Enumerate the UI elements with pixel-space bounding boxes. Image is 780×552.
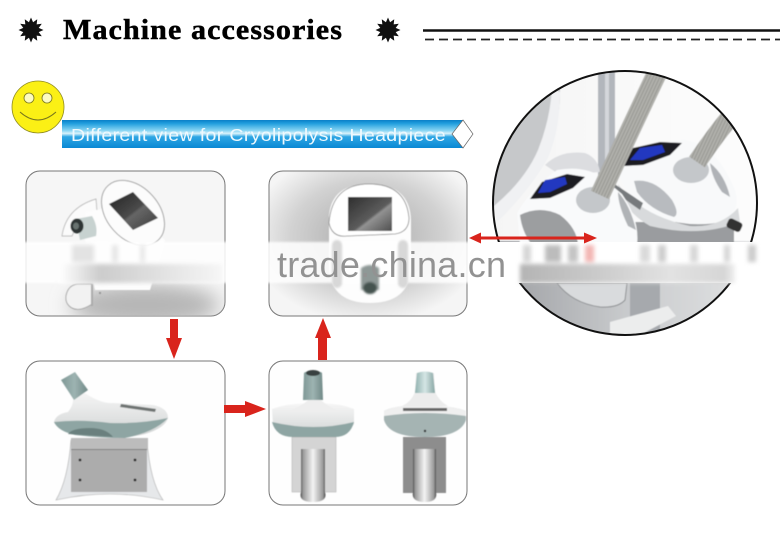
nozzle [61,372,88,400]
band over circle [470,242,762,283]
blurred content in left panel band [60,245,222,283]
panel: bottom-right views [269,361,467,505]
icon: smiley face [12,81,64,133]
head body [54,391,168,438]
left machine column [494,89,560,206]
right head [676,222,718,225]
base stand [56,440,163,500]
panel: circular close-up [493,71,757,335]
panel: top-left view [26,168,225,327]
watermark text: trade.china.cn [277,244,506,285]
bracket below heads [634,222,734,244]
blurred content in circle band [520,245,756,283]
seam between heads [612,183,643,210]
left head [517,169,637,245]
pole [598,71,615,186]
left head lobe [545,152,600,175]
grey plate [71,438,148,492]
hoses [600,71,658,195]
title: Machine accessories [63,15,343,46]
panel: bottom-left side view [26,361,225,505]
subtitle banner [62,120,473,148]
arrow: double-headed red link to close-up [469,232,597,244]
band over left panels [14,242,470,283]
front view unit [272,370,354,502]
header: star icon left [18,18,44,42]
watermark band [14,240,762,294]
blurred content in middle panel band [332,240,408,294]
arrow: bottom-left right to bottom-right [224,401,266,417]
lower parts [557,283,627,307]
header rule lines [423,30,780,40]
header: star icon right [376,18,400,42]
subtitle banner: Different view for Cryolipolysis Headpiece [71,125,446,145]
panel: top-middle view [269,171,467,316]
arrow: panel top-left down to bottom-left [166,319,182,359]
rear view unit [384,372,466,502]
arrow: bottom-right up to top-middle [315,318,331,360]
